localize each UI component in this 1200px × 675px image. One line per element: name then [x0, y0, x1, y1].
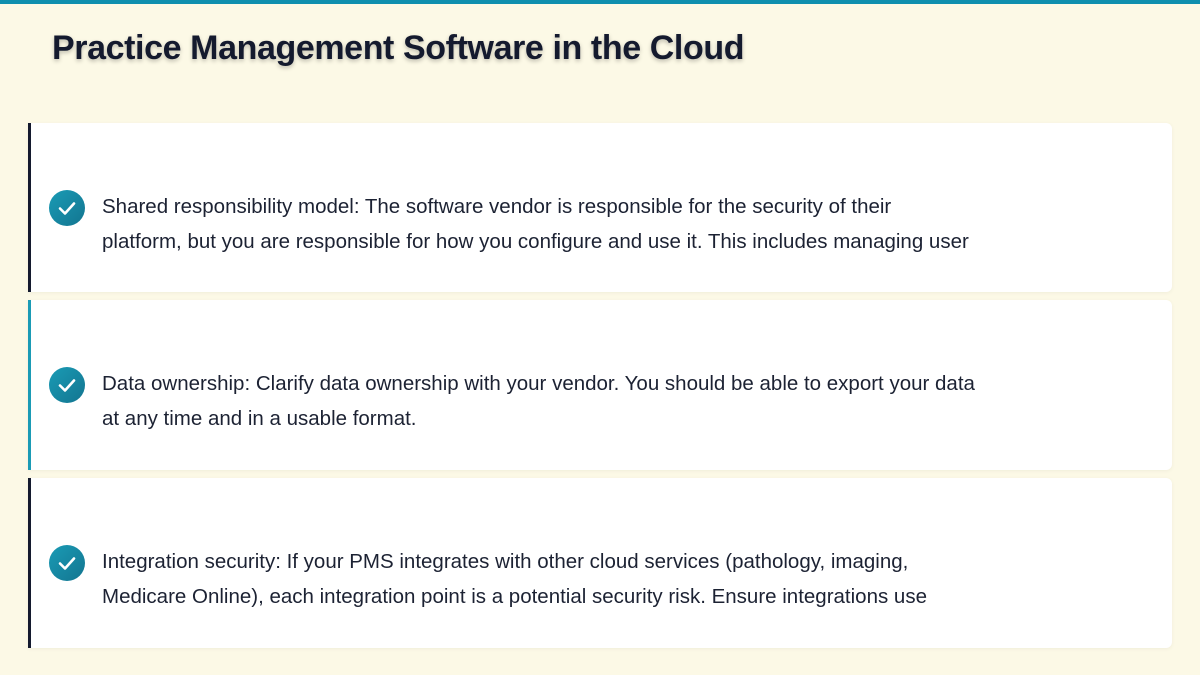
icon: check: [49, 367, 85, 403]
text block: Integration security: If your PMS integrates with other cloud services (pathology, imaging,: [102, 550, 908, 573]
text block: at any time and in a usable format.: [102, 407, 417, 430]
text block: [102, 195, 969, 253]
title: Practice Management Software in the Cloud: [52, 29, 744, 67]
text block: Data ownership: Clarify data ownership with your vendor. You should be able to export your data: [102, 372, 975, 395]
icon: check: [49, 545, 85, 581]
text block: Shared responsibility model: The software vendor is responsible for the security of their: [102, 195, 891, 218]
text block: Medicare Online), each integration point is a potential security risk. Ensure integrations use: [102, 585, 927, 608]
panel: data ownership: [28, 300, 1172, 470]
panel: integration security: [28, 478, 1172, 648]
text block: [102, 550, 927, 608]
text block: platform, but you are responsible for how you configure and use it. This includes managing user: [102, 230, 969, 253]
text block: [102, 372, 975, 430]
icon: check: [49, 190, 85, 226]
panel: shared responsibility: [28, 123, 1172, 292]
